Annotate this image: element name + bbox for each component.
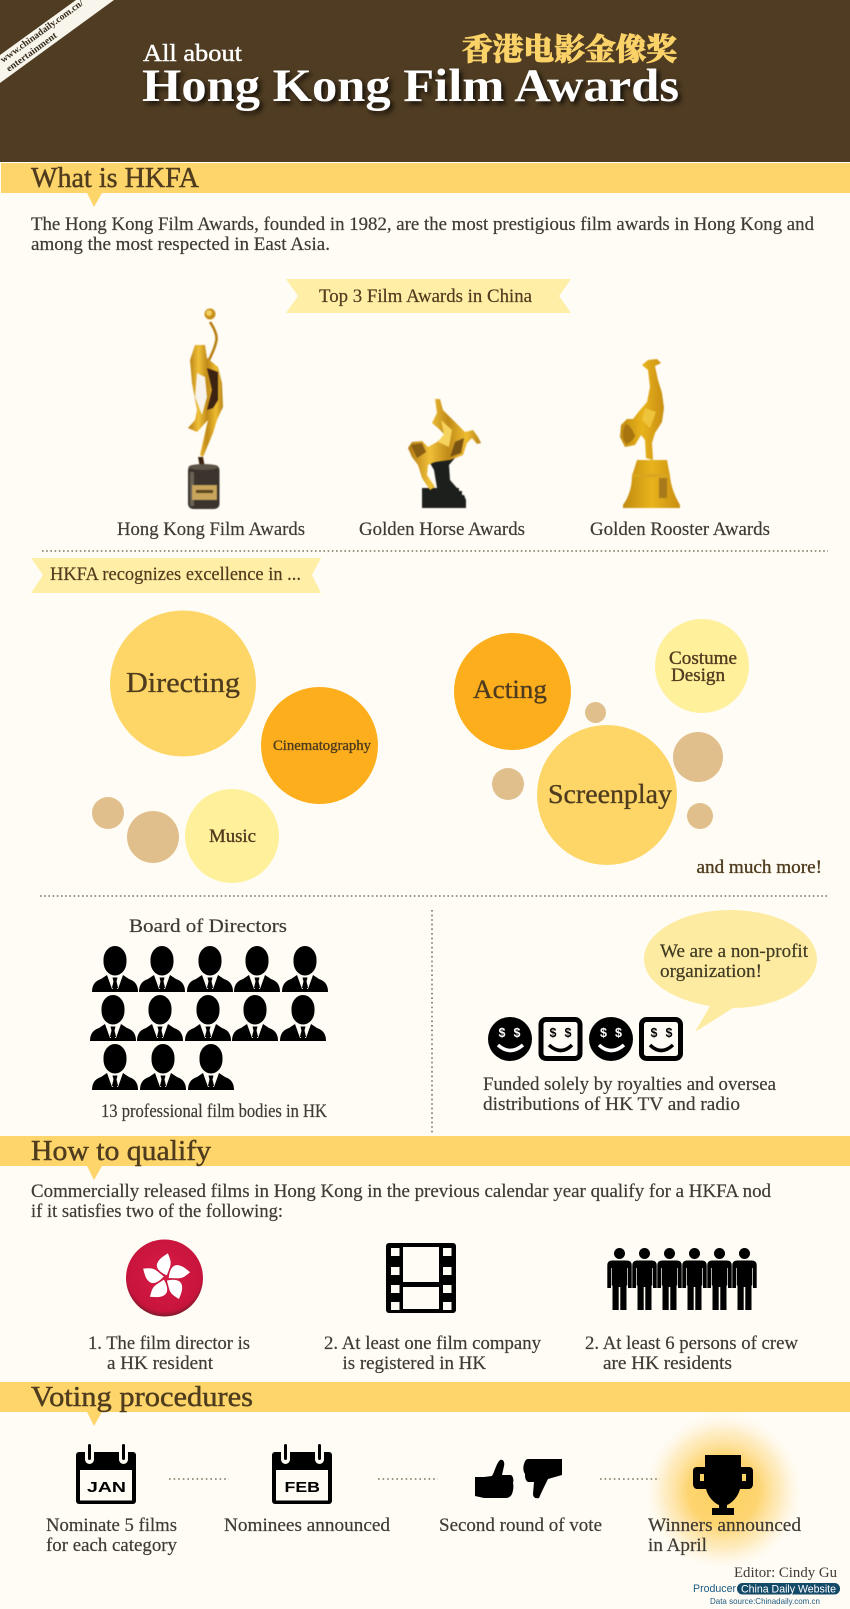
icon: smiley round: $ (499, 1026, 506, 1040)
section heading: how to qualify: How to qualify (31, 1136, 211, 1167)
bubble: Costume Design: Design (671, 666, 725, 686)
icon: smiley round: $ (615, 1026, 622, 1040)
speech bubble (644, 910, 817, 1032)
website ribbon: entertainment (5, 31, 60, 74)
winner glow (646, 1413, 802, 1569)
criterion 1: 1. The film director is (88, 1334, 250, 1354)
section heading: what is HKFA (1, 163, 850, 207)
bubble: Directing (110, 610, 256, 756)
editor: Editor: Cindy Gu (734, 1565, 837, 1581)
intro paragraph (31, 215, 815, 255)
icon: smiley square (642, 1020, 680, 1058)
data source: Data source:Chinadaily.com.cn (710, 1596, 820, 1606)
website ribbon (0, 0, 114, 83)
banner: HKFA recognizes excellence: HKFA recognizes excellence in ... (50, 565, 301, 585)
website ribbon: www.chinadaily.com.cn/ (0, 0, 86, 65)
qualify paragraph: Commercially released films in Hong Kong in the previous calendar year qualify for a HKFA nod (31, 1182, 772, 1202)
bubble: Acting: Acting (473, 674, 547, 704)
step 4 text: in April (648, 1536, 707, 1556)
panel: funding (483, 910, 817, 1115)
intro paragraph: among the most respected in East Asia. (31, 235, 330, 255)
icon: smiley round: $ (514, 1026, 521, 1040)
credits (693, 1565, 840, 1606)
label: Golden Rooster Awards: Golden Rooster Awards (590, 520, 770, 540)
trophy: Hong Kong Film Awards (188, 308, 223, 509)
criterion 2: 2. At least one film company (324, 1334, 542, 1354)
qualify paragraph: if it satisfies two of the following: (31, 1202, 283, 1222)
step 4 text (648, 1516, 802, 1556)
bubble cluster: right (454, 619, 749, 865)
icon: smiley square (541, 1020, 580, 1058)
step 4 text: Winners announced (648, 1516, 802, 1536)
bubble: Costume Design (655, 619, 749, 713)
text: and much more: and much more! (696, 858, 822, 878)
bubble: Directing: Directing (126, 667, 240, 699)
section heading: how to qualify (0, 1136, 850, 1180)
bubble cluster: left (92, 610, 378, 883)
icon: film strip (386, 1243, 456, 1313)
icon: smiley square: $ (651, 1026, 658, 1040)
step 1 text (46, 1516, 178, 1556)
icon: smiley round: $ (600, 1026, 607, 1040)
heading: board of directors: Board of Directors (129, 917, 287, 937)
icon: smiley round (488, 1017, 532, 1061)
title: Hong Kong Film Awards: Hong Kong Film Awards (142, 60, 679, 112)
section heading: voting procedures: Voting procedures (31, 1382, 253, 1413)
caption: film bodies: 13 professional film bodies in HK (101, 1102, 328, 1122)
icon: January calendar (76, 1443, 136, 1504)
banner: top 3 awards (286, 279, 571, 313)
icon: smiley round (589, 1017, 633, 1061)
trophy: Golden Horse Awards (408, 399, 481, 508)
small tan dots (92, 797, 179, 863)
qualify paragraph (31, 1182, 772, 1222)
banner: HKFA recognizes excellence (31, 558, 321, 593)
icon: Hong Kong flag (126, 1240, 203, 1316)
bubble: Music: Music (209, 827, 256, 847)
icon: February calendar (272, 1443, 332, 1504)
producer badge: China Daily Website (741, 1584, 836, 1596)
step 3 text: Second round of vote (439, 1516, 602, 1536)
criterion 3 (585, 1334, 799, 1374)
bubble: Cinematography (261, 687, 378, 804)
icon: smiley square: $ (565, 1026, 572, 1040)
criterion 2: is registered in HK (342, 1354, 487, 1374)
panel: board of directors (90, 917, 328, 1122)
step 1 text: for each category (46, 1536, 178, 1556)
header panel (0, 0, 850, 162)
criterion 1 (88, 1334, 250, 1374)
icon: six crew members (607, 1248, 757, 1310)
icon: January calendar: JAN (87, 1480, 126, 1496)
criterion 3: are HK residents (603, 1354, 732, 1374)
label: Golden Horse Awards: Golden Horse Awards (359, 520, 525, 540)
icon: thumbs up and down (475, 1459, 562, 1498)
title: Chinese name: 香港电影金像奖 (462, 25, 677, 69)
caption: funding (483, 1075, 776, 1115)
banner: top 3 awards: Top 3 Film Awards in China (319, 287, 532, 307)
speech bubble: organization! (660, 962, 762, 982)
title: all about: All about (143, 40, 242, 67)
bubble: Music (185, 789, 279, 883)
small tan dots (492, 702, 723, 829)
bubble: Cinematography: Cinematography (273, 738, 372, 754)
producer: Producer (693, 1583, 736, 1595)
trophy: Golden Rooster Awards (620, 359, 680, 508)
icon: winner trophy (693, 1455, 753, 1515)
pictogram: 13 directors (90, 946, 328, 1090)
criterion 1: a HK resident (107, 1354, 214, 1374)
caption: funding: distributions of HK TV and radio (483, 1095, 740, 1115)
intro paragraph: The Hong Kong Film Awards, founded in 1982, are the most prestigious film awards in Hong Kong and (31, 215, 815, 235)
icon: smiley square: $ (666, 1026, 673, 1040)
caption: funding: Funded solely by royalties and oversea (483, 1075, 776, 1095)
bubble: Screenplay: Screenplay (548, 779, 673, 809)
label: Hong Kong Film Awards: Hong Kong Film Awards (117, 520, 305, 540)
bubble: Screenplay (537, 725, 677, 865)
section heading: what is HKFA: What is HKFA (31, 163, 200, 194)
icon: February calendar: FEB (284, 1480, 320, 1496)
criterion 3: 2. At least 6 persons of crew (585, 1334, 799, 1354)
step 2 text: Nominees announced (224, 1516, 391, 1536)
step 1 text: Nominate 5 films (46, 1516, 177, 1536)
bubble: Costume Design: Costume (669, 649, 737, 669)
criterion 2 (324, 1334, 542, 1374)
icon: smiley square: $ (550, 1026, 557, 1040)
bubble: Acting (454, 633, 571, 750)
section heading: voting procedures (0, 1382, 850, 1426)
speech bubble: We are a non-profit (660, 942, 809, 962)
